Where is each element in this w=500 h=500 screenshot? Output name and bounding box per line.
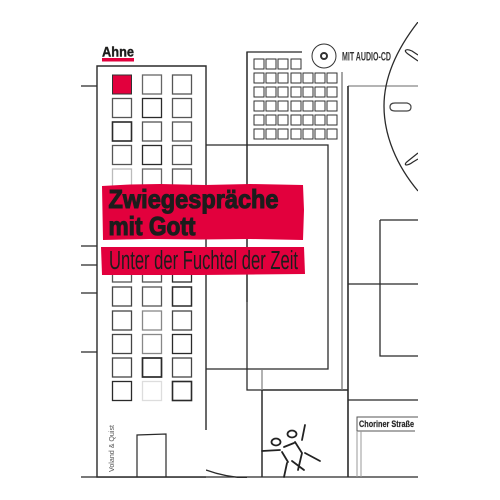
street sign [357, 417, 418, 477]
subtitle banner: Unter der Fuchtel der Zeit [109, 247, 298, 275]
author name: Ahne [102, 44, 134, 60]
title banner [102, 184, 304, 241]
large clock circle [384, 22, 418, 191]
main building [97, 66, 206, 477]
red window [112, 75, 132, 94]
publisher: Voland & Quist [107, 424, 116, 472]
title banner: Zwiegespräche [108, 184, 278, 214]
subtitle banner [101, 247, 305, 275]
office tower windows [254, 59, 337, 139]
audio CD label: MIT AUDIO-CD [342, 50, 391, 64]
street line drawing [81, 52, 418, 478]
building windows [112, 75, 192, 400]
dancing figures [262, 425, 320, 477]
CD icon [312, 44, 336, 68]
title banner: mit Gott [108, 211, 196, 241]
clock slots [390, 50, 418, 165]
street sign: Choriner Straße [359, 419, 414, 430]
door [137, 434, 166, 477]
